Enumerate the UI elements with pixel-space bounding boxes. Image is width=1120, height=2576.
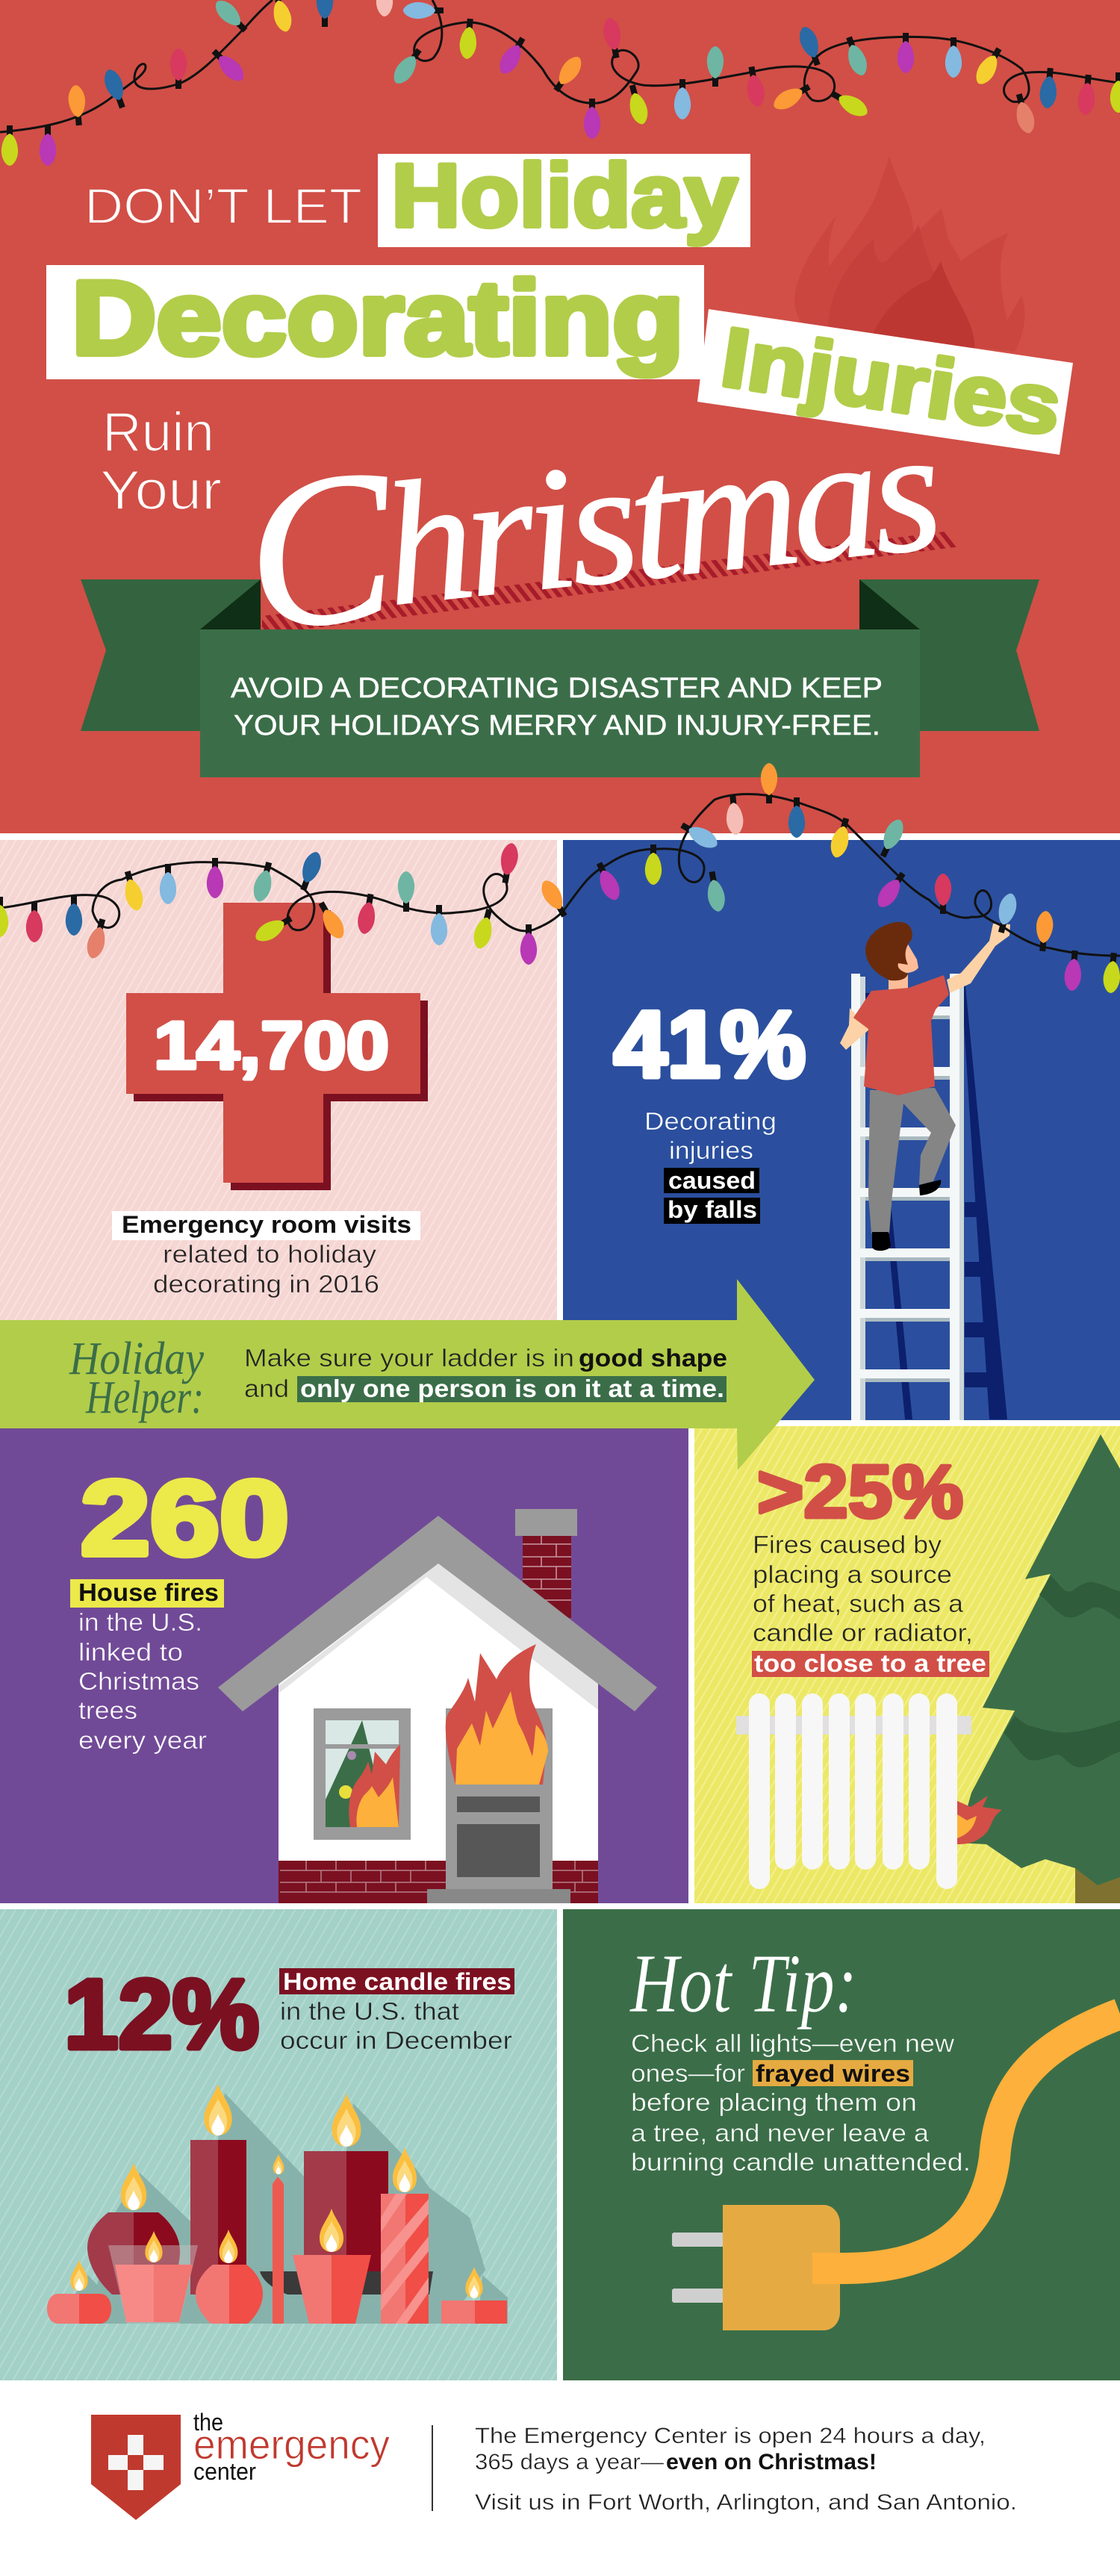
caption: house fires bbox=[70, 1578, 224, 1754]
hatched shadow under Christmas bbox=[262, 532, 960, 635]
icon: small flame on tree bbox=[957, 1796, 1002, 1844]
panel: hero bbox=[0, 0, 1120, 833]
caption: emergency room visits: Emergency room visits bbox=[122, 1211, 411, 1238]
text: hours and locations: even on Christmas! bbox=[666, 2450, 877, 2474]
icon: background flame bbox=[794, 156, 1024, 355]
caption: house fires: Christmas bbox=[78, 1667, 199, 1695]
icon: tree bbox=[957, 1434, 1120, 1903]
icon: plug and cord bbox=[672, 2014, 1120, 2330]
caption: fires caused by heat: candle or radiator, bbox=[753, 1619, 973, 1646]
caption: house fires: House fires bbox=[78, 1578, 219, 1606]
caption: fires caused by heat: too close to a tree bbox=[754, 1649, 986, 1677]
panel: falls bbox=[563, 840, 1120, 1420]
caption: house fires: trees bbox=[78, 1696, 137, 1724]
statistic: 260: 260 bbox=[81, 1459, 289, 1578]
thin candle bbox=[273, 2177, 284, 2324]
door bbox=[427, 1708, 570, 1903]
string of lights: middle bbox=[0, 763, 1120, 994]
ribbon bbox=[81, 579, 1039, 777]
text: ladder advice: good shape bbox=[579, 1344, 727, 1372]
icon: candles bbox=[47, 2084, 508, 2324]
caption: fires caused by heat: of heat, such as a bbox=[753, 1590, 964, 1617]
roof bbox=[218, 1516, 657, 1711]
text: hot tip: a tree, and never leave a bbox=[631, 2119, 930, 2147]
flames from door bbox=[446, 1644, 548, 1785]
glass candle bbox=[108, 2245, 198, 2324]
title script: Christmas: hristmas bbox=[375, 391, 945, 642]
panel: house fires bbox=[0, 1428, 688, 1903]
logo: center bbox=[193, 2458, 256, 2485]
icon: person on ladder bbox=[840, 922, 1010, 1251]
text: ladder advice: and bbox=[244, 1375, 289, 1402]
text: hours and locations bbox=[475, 2424, 1017, 2515]
logo: emergency bbox=[193, 2421, 390, 2468]
caption: home candle fires: Home candle fires bbox=[283, 1968, 511, 1995]
logo shield bbox=[91, 2415, 181, 2520]
script heading: Holiday Helper bbox=[69, 1334, 204, 1423]
caption: house fires: linked to bbox=[78, 1638, 183, 1666]
window with tree and flames bbox=[314, 1708, 411, 1840]
statistic: 41%: 41% bbox=[614, 992, 806, 1097]
text: ladder advice: Make sure your ladder is in bbox=[244, 1344, 574, 1372]
caption: decorating injuries caused by falls bbox=[644, 1107, 777, 1224]
script heading: Hot Tip: Hot Tip: bbox=[629, 1938, 857, 2030]
caption: house fires: in the U.S. bbox=[78, 1608, 202, 1636]
text: hot tip: before placing them on bbox=[631, 2088, 917, 2116]
text: ladder advice bbox=[244, 1344, 727, 1402]
tall candle bbox=[190, 2140, 246, 2295]
title text: Ruin: Ruin bbox=[102, 401, 214, 463]
title script: Christmas: C bbox=[235, 423, 408, 677]
panel: hot tip bbox=[563, 1909, 1120, 2380]
string of lights: top bbox=[0, 0, 1120, 166]
text: ladder advice: only one person is on it at a time. bbox=[300, 1375, 724, 1402]
plate bbox=[260, 2271, 433, 2295]
title box: Decorating: Decorating bbox=[72, 259, 684, 376]
title box: Injuries: Injuries bbox=[715, 310, 1067, 452]
caption: house fires: every year bbox=[78, 1726, 207, 1754]
text: hot tip: Check all lights—even new bbox=[631, 2029, 954, 2057]
wide candle bbox=[304, 2151, 388, 2271]
title box: Holiday: Holiday bbox=[391, 146, 738, 246]
title text: Don't let: DON’T LET bbox=[84, 178, 362, 234]
caption: home candle fires bbox=[279, 1968, 514, 2054]
title text: Your: Your bbox=[100, 459, 222, 521]
caption: fires caused by heat: placing a source bbox=[753, 1561, 952, 1588]
icon: radiator bbox=[736, 1693, 971, 1889]
caption: decorating injuries caused by falls: by falls bbox=[668, 1196, 757, 1223]
caption: fires caused by heat bbox=[752, 1531, 989, 1677]
striped candle bbox=[381, 2194, 429, 2324]
text: hot tip: frayed wires bbox=[756, 2060, 910, 2087]
logo: the bbox=[193, 2409, 223, 2436]
panel: emergency room visits bbox=[0, 840, 557, 1333]
small left candle bbox=[47, 2294, 111, 2324]
text: hot tip: ones—for bbox=[631, 2059, 745, 2087]
panel: fires too close to a tree bbox=[694, 1426, 1120, 1903]
icon: red cross with 14,700: 14,700 bbox=[154, 1009, 389, 1083]
logo bbox=[91, 2409, 390, 2520]
statistic: >25%: >25% bbox=[757, 1450, 963, 1534]
candle long shadows bbox=[55, 2093, 508, 2324]
statistic: 12%: 12% bbox=[64, 1959, 259, 2069]
caption: decorating injuries caused by falls: injuries bbox=[669, 1136, 753, 1164]
icon: red cross with 14,700 bbox=[126, 903, 428, 1190]
text: hours and locations: 365 days a year— bbox=[475, 2450, 664, 2474]
caption: emergency room visits bbox=[112, 1211, 420, 1298]
icon: burning house bbox=[218, 1509, 657, 1903]
flames bbox=[70, 2084, 483, 2298]
text: hours and locations: Visit us in Fort Worth, Arlington, and San Antonio. bbox=[475, 2490, 1017, 2515]
caption: emergency room visits: related to holiday bbox=[163, 1240, 377, 1268]
caption: decorating injuries caused by falls: Decorating bbox=[644, 1107, 777, 1135]
script heading: Holiday Helper: Helper: bbox=[85, 1372, 204, 1423]
script heading: Holiday Helper: Holiday bbox=[69, 1334, 204, 1384]
caption: decorating injuries caused by falls: caused bbox=[668, 1167, 756, 1194]
text: hours and locations: The Emergency Center is open 24 hours a day, bbox=[475, 2424, 986, 2448]
footer bbox=[0, 2380, 1120, 2576]
ribbon: YOUR HOLIDAYS MERRY AND INJURY-FREE. bbox=[234, 710, 880, 741]
text: hot tip: burning candle unattended. bbox=[631, 2148, 971, 2176]
caption: home candle fires: occur in December bbox=[280, 2026, 512, 2054]
sphere candle, dark red bbox=[87, 2212, 180, 2295]
icon: ladder bbox=[851, 974, 1007, 1420]
ribbon: AVOID A DECORATING DISASTER AND KEEP bbox=[231, 673, 883, 704]
holiday helper arrow bbox=[0, 1279, 815, 1470]
caption: fires caused by heat: Fires caused by bbox=[753, 1531, 942, 1558]
small right candle bbox=[441, 2300, 507, 2324]
round candle bbox=[196, 2265, 263, 2324]
caption: emergency room visits: decorating in 2016 bbox=[153, 1270, 379, 1298]
caption: home candle fires: in the U.S. that bbox=[280, 1997, 459, 2025]
tapered candle bbox=[293, 2255, 371, 2324]
chimney bbox=[515, 1509, 577, 1618]
brick base bbox=[279, 1861, 598, 1903]
text: hot tip bbox=[631, 2029, 971, 2176]
panel: candle fires bbox=[0, 1909, 557, 2380]
